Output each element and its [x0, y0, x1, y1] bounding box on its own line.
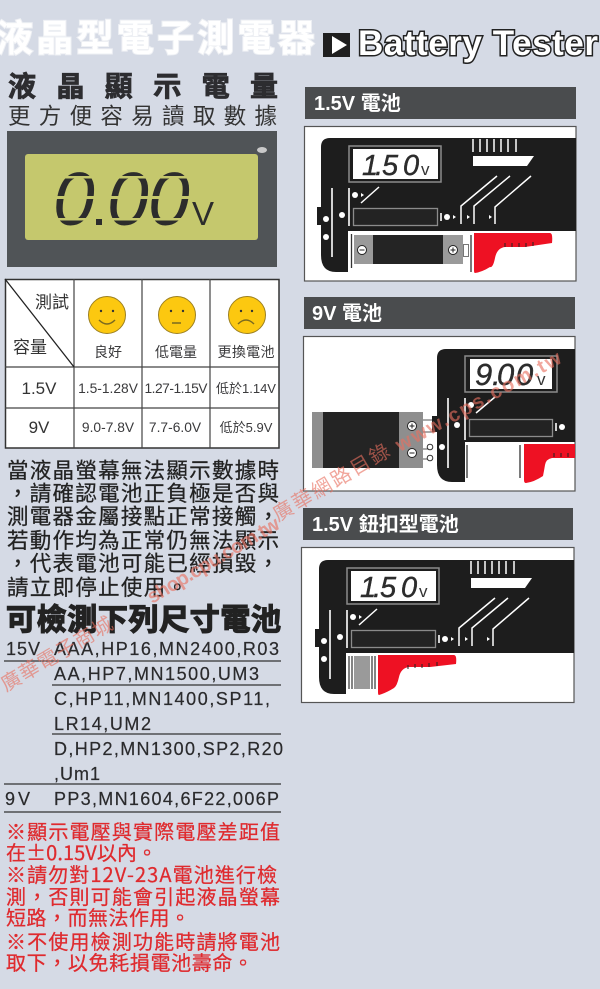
- text block: red notes: 取下，以免耗損電池壽命。: [6, 947, 253, 976]
- red slider: [474, 233, 552, 273]
- text block: red notes: ※請勿對12V-23A電池進行檢: [6, 859, 277, 888]
- table: battery sizes: D,HP2,MN1300,SP2,R20: [54, 739, 283, 759]
- row: 1.5V: 1.27-1.15V: [144, 381, 208, 396]
- LCD reading: 1.50: [362, 150, 419, 182]
- text block: red notes: ※不使用檢測功能時請將電池: [6, 926, 280, 955]
- header bar: [304, 297, 575, 329]
- tester body: [315, 560, 574, 694]
- row: 1.5V: 1.5V: [22, 379, 57, 398]
- table: battery sizes: 15V: [6, 639, 40, 659]
- LCD reading: 1.50: [360, 572, 417, 604]
- red slider: [378, 655, 456, 695]
- header bar: [303, 508, 573, 540]
- table: battery sizes: ,Um1: [54, 764, 100, 784]
- table: battery sizes: 9V: [5, 789, 30, 809]
- title: 液晶型電子測電器: [0, 8, 315, 62]
- LCD unit: v: [421, 160, 430, 179]
- watermark: [0, 347, 566, 697]
- LCD segment gaps: [50, 176, 195, 220]
- table: battery sizes: LR14,UM2: [54, 714, 151, 734]
- AA battery: [352, 234, 471, 272]
- watermark: www.cps.com.tw: [391, 347, 566, 457]
- text block: red notes: 測，否則可能會引起液晶螢幕: [6, 881, 280, 910]
- text block: red notes: ※顯示電壓與實際電壓差距值: [6, 816, 280, 845]
- diagram frame: [304, 336, 575, 491]
- header label: 9V 電池: [312, 302, 382, 325]
- text block: instructions: 當液晶螢幕無法顯示數據時: [7, 454, 279, 485]
- row: 1.5V: [22, 379, 276, 398]
- text block: red notes: 短路，而無法作用。: [6, 902, 190, 931]
- icon: sad face: [228, 296, 266, 334]
- status labels: [94, 342, 274, 362]
- table: battery sizes: PP3,MN1604,6F22,006P: [54, 789, 279, 809]
- status labels: 更換電池: [218, 342, 274, 362]
- icon: arrow box: [323, 33, 350, 57]
- text block: instructions: ，代表電池可能已經損毀，: [7, 547, 279, 578]
- table: battery status: [5, 279, 279, 448]
- row: 1.5V: 低於1.14V: [216, 381, 276, 396]
- panel: 9V battery: [304, 297, 575, 491]
- diagram frame: [302, 548, 574, 702]
- diagram frame: [304, 126, 576, 281]
- row: 1.5V: 1.5-1.28V: [78, 381, 139, 396]
- text block: instructions: 請立即停止使用。: [7, 571, 188, 602]
- LCD dot: [96, 219, 102, 225]
- tester body: [437, 349, 575, 483]
- LCD reading: 9.00: [475, 357, 533, 392]
- status labels: 低電量: [155, 342, 197, 362]
- row: 9V: 7.7-6.0V: [149, 420, 202, 435]
- row: 9V: 9.0-7.8V: [82, 420, 135, 435]
- LCD unit: V: [192, 195, 214, 232]
- text block: instructions: 若動作均為正常仍無法顯示: [7, 524, 279, 555]
- watermark: 廣華網路目錄: [266, 435, 395, 527]
- heading: supported sizes: 可檢測下列尺寸電池: [6, 595, 281, 639]
- LCD digits: 00: [107, 157, 190, 241]
- table: battery sizes: [4, 639, 283, 812]
- row: 9V: [29, 418, 273, 437]
- panel: LCD photo: [7, 131, 277, 267]
- row: 9V: 低於5.9V: [220, 420, 273, 435]
- text block: instructions: ，請確認電池正負極是否與: [7, 477, 279, 508]
- table: battery sizes: C,HP11,MN1400,SP11,: [54, 689, 270, 709]
- header bar: [305, 87, 576, 119]
- row: 9V: 9V: [29, 418, 50, 437]
- LCD unit: v: [419, 582, 428, 601]
- status labels: 良好: [94, 342, 122, 362]
- text block: instructions: 測電器金屬接點正常接觸，: [7, 500, 279, 531]
- LCD unit: v: [537, 370, 546, 389]
- header label: 1.5V 鈕扣型電池: [312, 512, 459, 536]
- header label: 1.5V 電池: [314, 92, 401, 115]
- LCD reading: 0: [53, 157, 95, 241]
- header: test: 測試: [35, 288, 69, 313]
- icon: happy face: [88, 296, 126, 334]
- subheading: 更方便容易讀取數據: [8, 99, 277, 131]
- panel: 1.5V battery: [304, 87, 576, 281]
- table: battery sizes: AAA,HP16,MN2400,R03: [54, 639, 279, 659]
- table: battery sizes: AA,HP7,MN1500,UM3: [54, 664, 259, 684]
- text block: instructions: [7, 454, 279, 602]
- 9V battery: [312, 412, 437, 468]
- text block: red notes: 在±0.15V以內。: [6, 837, 157, 866]
- heading: LCD display: 液晶顯示電量: [8, 65, 278, 105]
- english title: Battery Tester: [358, 24, 598, 63]
- header: capacity: 容量: [13, 333, 47, 358]
- text block: red notes: [6, 816, 280, 976]
- watermark: shop.cpu.com.tw: [143, 513, 284, 608]
- tester body: [317, 138, 576, 272]
- button battery: [349, 656, 375, 689]
- panel: 1.5V button battery: [302, 508, 574, 702]
- icon: neutral face: [158, 296, 196, 334]
